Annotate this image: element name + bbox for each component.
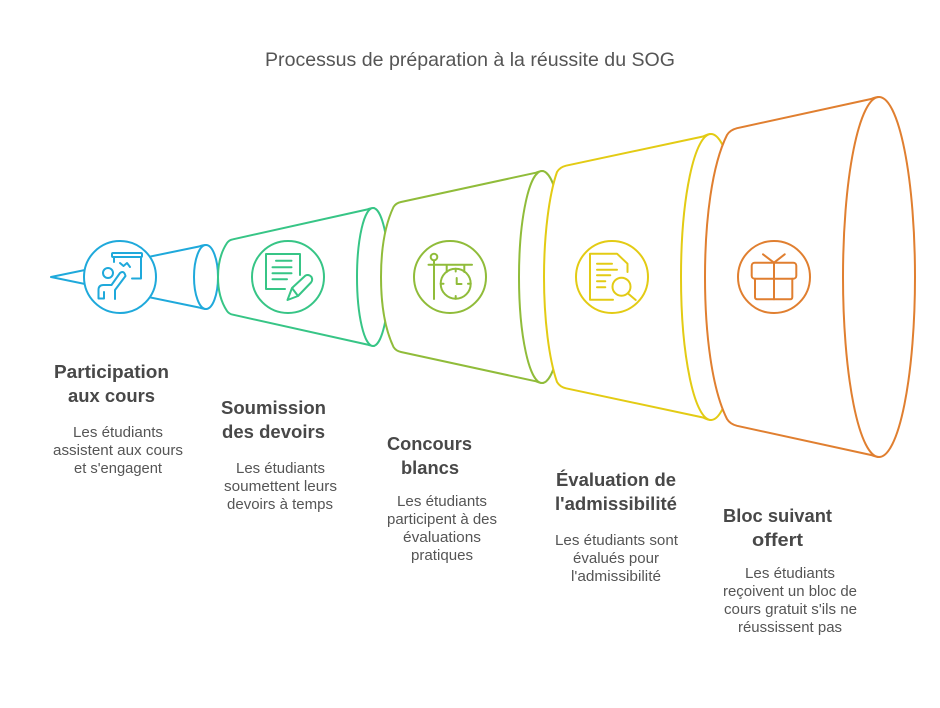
- step 3 text: participent à des: [387, 511, 497, 528]
- step 2 text: [224, 460, 337, 513]
- funnel segment: green: [218, 208, 389, 346]
- step 1 heading: [54, 361, 169, 406]
- step 4 text: l'admissibilité: [571, 568, 661, 585]
- step 2 text: Les étudiants: [236, 460, 325, 477]
- step 5 text: Les étudiants: [745, 565, 835, 582]
- step 4 text: évalués pour: [573, 550, 659, 567]
- title: Processus de préparation à la réussite du SOG: [265, 49, 675, 71]
- step 5 heading: [723, 505, 832, 550]
- icon: document and magnifier: [576, 241, 648, 313]
- step 4 heading: Évaluation de: [556, 469, 676, 490]
- step 3 text: évaluations: [403, 529, 481, 546]
- funnel segment: blue: [51, 245, 218, 309]
- step 1 text: assistent aux cours: [53, 442, 183, 459]
- step 5 text: cours gratuit s'ils ne: [724, 601, 857, 618]
- step 3 heading: [387, 433, 472, 478]
- step 4 text: [555, 532, 679, 585]
- funnel segment: yellow: [544, 134, 741, 420]
- step 1 text: et s'engagent: [74, 460, 163, 477]
- step 2 text: devoirs à temps: [227, 496, 333, 513]
- icon: presenter at board: [84, 241, 156, 313]
- step 3 text: pratiques: [411, 547, 473, 564]
- step 2 heading: des devoirs: [222, 421, 325, 442]
- step 4 text: Les étudiants sont: [555, 532, 679, 549]
- step 2 text: soumettent leurs: [224, 478, 337, 495]
- funnel segment: orange: [705, 97, 915, 457]
- icon: gift: [738, 241, 810, 313]
- step 1 text: Les étudiants: [73, 424, 163, 441]
- step 5 heading: offert: [752, 529, 803, 550]
- step 3 heading: blancs: [401, 457, 459, 478]
- step 4 heading: [555, 469, 677, 514]
- icon: document and pencil: [252, 241, 324, 313]
- step 3 text: Les étudiants: [397, 493, 487, 510]
- step 1 heading: aux cours: [68, 385, 155, 406]
- step 2 heading: [221, 397, 326, 442]
- step 5 text: reçoivent un bloc de: [723, 583, 857, 600]
- step 1 text: [53, 424, 183, 477]
- step 3 text: [387, 493, 497, 564]
- step 4 heading: l'admissibilité: [555, 493, 677, 514]
- funnel segment: olive: [381, 171, 565, 383]
- icon: hanging clock: [414, 241, 486, 313]
- step 2 heading: Soumission: [221, 397, 326, 418]
- step 5 text: réussissent pas: [738, 619, 842, 636]
- step 1 heading: Participation: [54, 361, 169, 382]
- step 3 heading: Concours: [387, 433, 472, 454]
- step 5 heading: Bloc suivant: [723, 505, 832, 526]
- step 5 text: [723, 565, 857, 636]
